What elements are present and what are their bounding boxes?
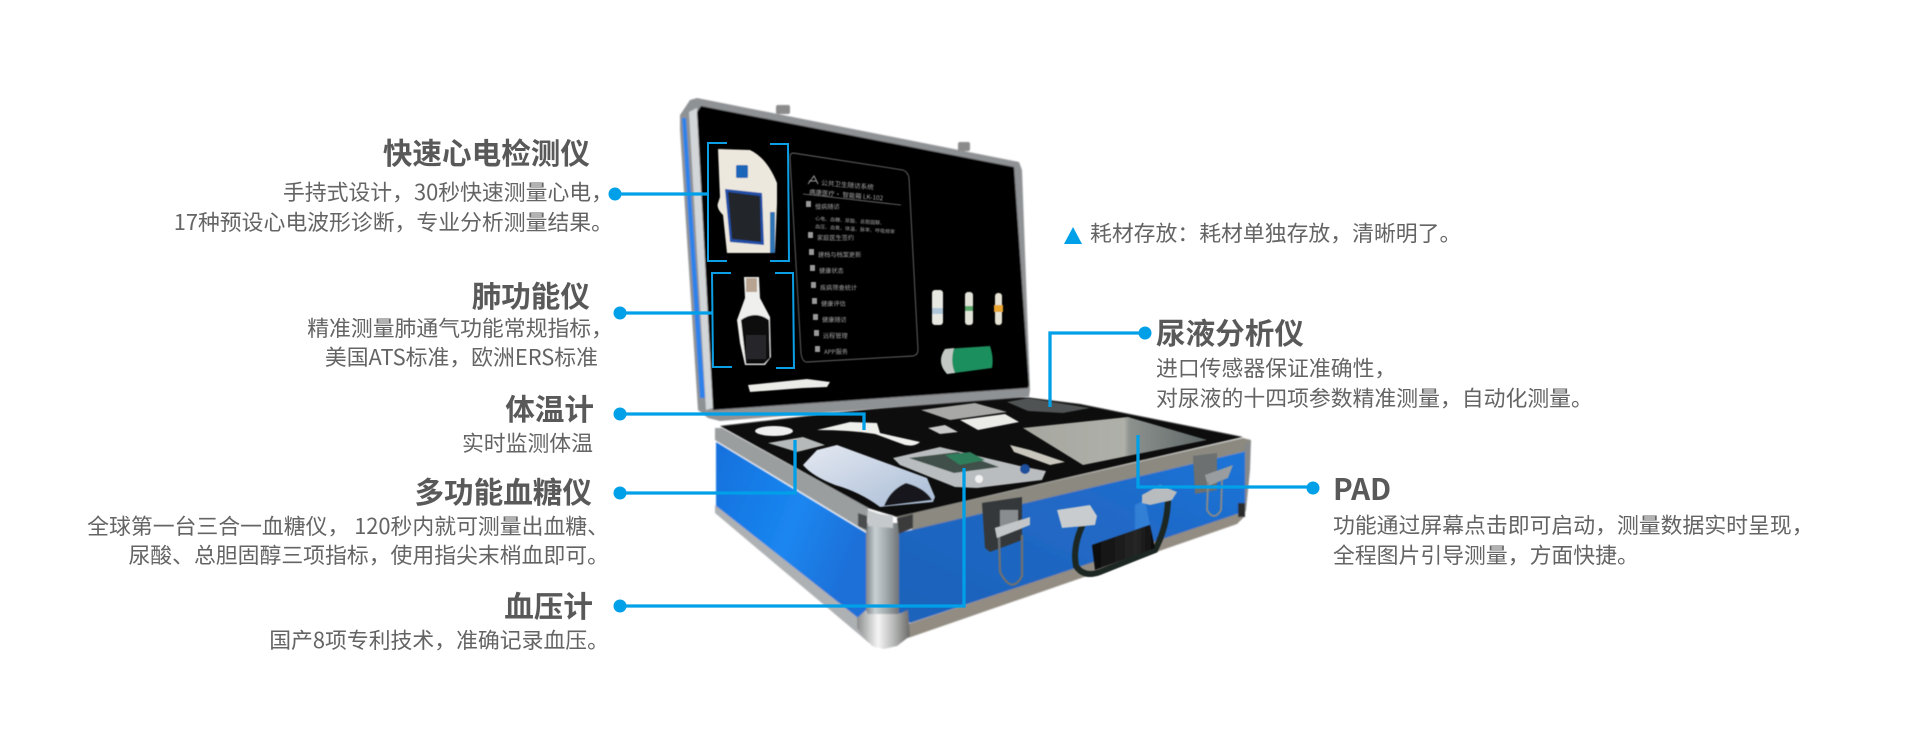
urine analyzer — [1007, 398, 1090, 413]
callout: spirometer: 美国ATS标准，欧洲ERS标准 — [325, 341, 598, 372]
ECG device in lid — [718, 149, 777, 253]
callout: PAD — [1333, 466, 1814, 570]
instruction panel printed in lid — [790, 153, 918, 362]
leader lines and dots — [615, 194, 1313, 606]
left rim — [715, 428, 868, 532]
bottom corner cap — [857, 610, 910, 649]
callout: ECG monitor: 快速心电检测仪 — [383, 130, 590, 173]
instruction panel printed in lid: 健康随访 — [822, 315, 847, 324]
consumable tubes — [932, 290, 1003, 325]
note text: 耗材存放：耗材单独存放，清晰明了。 — [1090, 217, 1461, 248]
corner brackets — [858, 513, 867, 530]
callout: glucose meter — [87, 469, 609, 570]
callout: blood pressure meter: 国产8项专利技术，准确记录血压。 — [269, 624, 609, 655]
callout: blood pressure meter — [269, 583, 609, 655]
callout: spirometer — [307, 273, 613, 372]
white accessories — [755, 426, 793, 436]
instruction panel printed in lid: 心电、血糖、尿酸、总胆固醇、 — [815, 215, 885, 227]
callout: ECG monitor: 17种预设心电波形诊断，专业分析测量结果。 — [174, 206, 613, 237]
callout: glucose meter: 尿酸、总胆固醇三项指标，使用指尖末梢血即可。 — [128, 539, 609, 570]
lower left frame — [715, 505, 877, 648]
callout: thermometer: 体温计 — [505, 386, 594, 429]
handle grip — [1092, 525, 1155, 570]
instruction panel printed in lid: APP服务 — [824, 347, 848, 356]
lid latches — [776, 105, 790, 114]
left blue strip — [682, 118, 705, 398]
left blue face — [716, 442, 866, 618]
instruments in tray — [755, 398, 1207, 507]
right handle mount — [1142, 485, 1177, 505]
callout: glucose meter: 全球第一台三合一血糖仪， 120秒内就可测量出血糖、 — [87, 510, 609, 541]
latches and handle — [982, 453, 1233, 585]
lid of case — [680, 98, 1030, 421]
test trays — [921, 403, 1007, 420]
callout: urine analyzer — [1156, 310, 1593, 413]
handle arms — [1075, 497, 1168, 574]
callout: spirometer: 肺功能仪 — [472, 273, 590, 316]
callout: urine analyzer: 对尿液的十四项参数精准测量，自动化测量。 — [1156, 382, 1593, 413]
lancet pen — [748, 379, 830, 392]
callout: ECG monitor: 手持式设计，30秒快速测量心电， — [283, 176, 613, 207]
callout: blood pressure meter: 血压计 — [504, 583, 593, 626]
callout: PAD: 全程图片引导测量，方面快捷。 — [1333, 539, 1639, 570]
instruction panel printed in lid: 疾病筛查统计 — [820, 283, 857, 292]
spirometer in lid — [737, 277, 771, 365]
callout: thermometer: 实时监测体温 — [462, 427, 593, 458]
lid frame — [680, 98, 1030, 421]
left latch — [982, 497, 1022, 552]
callout: urine analyzer: 进口传感器保证准确性， — [1156, 352, 1396, 383]
tray interior — [720, 394, 1243, 517]
icon: triangle — [1064, 227, 1082, 244]
callout: thermometer — [462, 386, 594, 458]
instruction panel printed in lid: 建档与档案更新 — [818, 250, 861, 259]
glucose meter — [768, 437, 825, 452]
note: consumables storage — [1064, 217, 1461, 248]
right latch — [1193, 453, 1217, 494]
green test-strip bottle — [941, 346, 993, 374]
blue highlight near handle — [1135, 500, 1150, 530]
BP monitor — [893, 447, 1046, 488]
corner post — [866, 523, 899, 615]
left handle mount — [1057, 505, 1097, 528]
callout: glucose meter: 多功能血糖仪 — [414, 469, 592, 512]
inner black foam — [697, 106, 1029, 410]
device highlight bracket: spirometer — [712, 273, 794, 368]
silver inner band — [689, 108, 713, 410]
instruction panel printed in lid: 病康医疗• 智能箱 LK-102 — [809, 187, 884, 203]
case base body — [715, 394, 1251, 649]
instruction panel printed in lid: 健康评估 — [821, 299, 846, 308]
BP cuff — [803, 445, 935, 507]
instruction panel printed in lid: 健康状态 — [819, 266, 844, 275]
callout: PAD: 功能通过屏幕点击即可启动，测量数据实时呈现， — [1333, 509, 1814, 540]
right corner — [1238, 440, 1251, 518]
instruction panel printed in lid: 家庭医生签约 — [817, 233, 854, 242]
instruction panel printed in lid: 血压、血氧、体温、脉率、呼吸频率 — [815, 223, 895, 236]
lower front frame — [908, 514, 1243, 638]
front rim — [897, 438, 1251, 530]
device highlight bracket: ECG — [708, 143, 789, 261]
instruction panel printed in lid: 慢病随访 — [815, 202, 840, 211]
front blue face — [899, 451, 1247, 623]
callout: urine analyzer: 尿液分析仪 — [1156, 310, 1304, 353]
PAD tablet — [1023, 417, 1207, 465]
callout: spirometer: 精准测量肺通气功能常规指标， — [307, 312, 613, 343]
instruction panel printed in lid: 公共卫生随访系统 — [821, 177, 875, 192]
corner top cap — [868, 510, 893, 528]
callout: ECG monitor — [174, 130, 613, 237]
callout: PAD: PAD — [1333, 466, 1391, 509]
instruction panel printed in lid: 远程管理 — [823, 331, 848, 340]
